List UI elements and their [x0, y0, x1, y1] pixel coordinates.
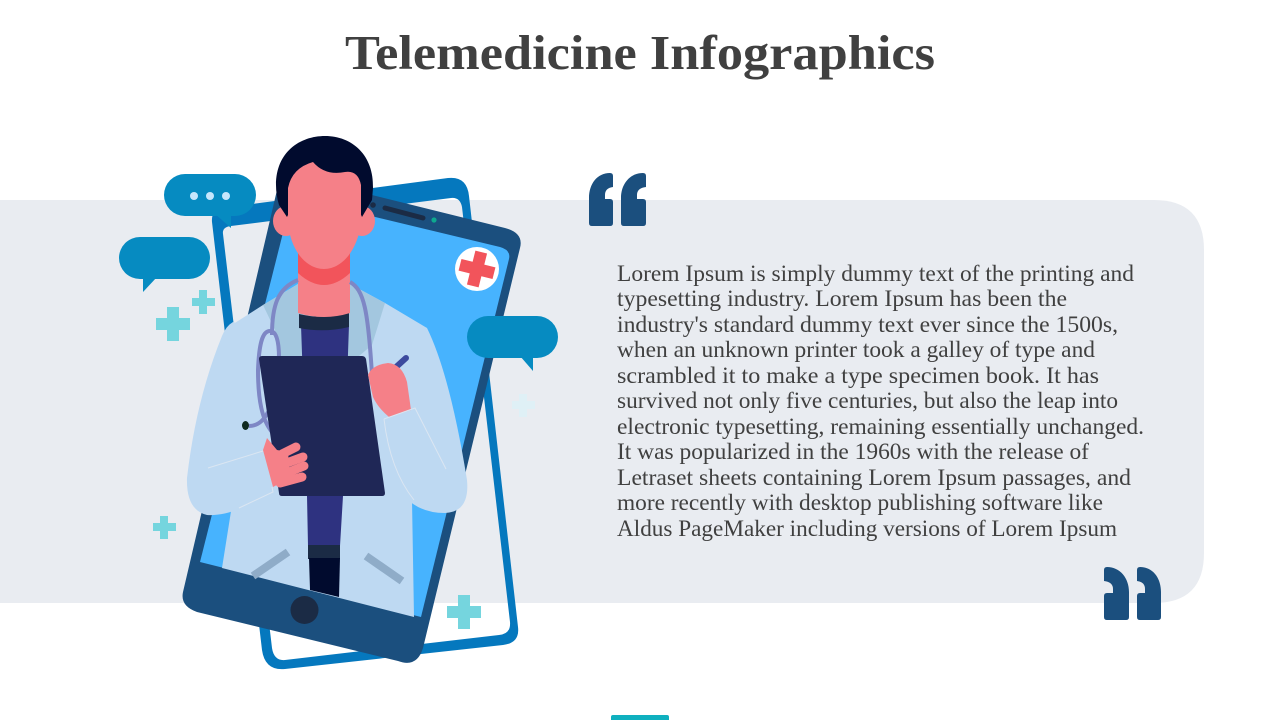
coat pockets — [253, 552, 402, 581]
plus icons — [153, 290, 535, 629]
neck — [298, 245, 350, 317]
coat seams — [208, 408, 446, 508]
text block: body paragraph: typesetting industry. Lorem Ipsum has been the — [617, 286, 1067, 311]
text block: body paragraph: electronic typesetting, remaining essentially unchanged. — [617, 414, 1144, 439]
text block: body paragraph: survived not only five centuries, but also the leap into — [617, 388, 1118, 413]
text block: body paragraph: Lorem Ipsum is simply dummy text of the printing and — [617, 261, 1135, 286]
trousers — [309, 558, 340, 597]
left hand — [263, 438, 304, 487]
panel: grey background band — [0, 200, 1204, 603]
front phone body — [183, 176, 521, 663]
text block: body paragraph: scrambled it to make a type specimen book. It has — [617, 363, 1099, 388]
text block: body paragraph: when an unknown printer took a galley of type and — [617, 337, 1095, 362]
illustration: doctor in smartphone — [119, 136, 558, 669]
chat bubble with dots — [164, 174, 256, 228]
title: Telemedicine Infographics — [345, 25, 935, 80]
icon: closing quotation mark — [1104, 567, 1161, 620]
coat body — [222, 284, 427, 617]
belt — [308, 545, 340, 559]
stethoscope — [249, 280, 372, 432]
icon: red cross badge — [455, 247, 499, 291]
ears — [273, 206, 375, 236]
text block: body paragraph: more recently with desktop publishing software like — [617, 490, 1103, 515]
stethoscope chest piece — [242, 421, 249, 430]
shirt — [301, 325, 349, 546]
footer teal tab — [611, 715, 669, 720]
text block: body paragraph: industry's standard dummy text ever since the 1500s, — [617, 312, 1118, 337]
coat right sleeve — [375, 320, 467, 513]
chat bubble left — [119, 237, 210, 292]
face — [288, 162, 361, 269]
icon: opening quotation mark — [589, 173, 646, 226]
chat bubble right — [467, 316, 558, 371]
text block: body paragraph: It was popularized in the 1960s with the release of — [617, 439, 1089, 464]
coat lapels — [263, 284, 385, 362]
back phone outline — [212, 178, 518, 669]
doctor figure — [187, 136, 467, 617]
hair — [276, 136, 373, 217]
pen — [395, 358, 406, 368]
phone home button — [290, 596, 318, 624]
neck shadow — [298, 250, 350, 285]
text block: body paragraph: Aldus PageMaker including versions of Lorem Ipsum — [617, 516, 1117, 541]
clipboard — [259, 356, 385, 496]
right hand — [368, 363, 411, 417]
phone speaker and camera — [370, 202, 437, 223]
coat left sleeve — [187, 322, 300, 515]
text block: body paragraph: Letraset sheets containing Lorem Ipsum passages, and — [617, 465, 1132, 490]
phone screen — [200, 197, 509, 617]
text block: body paragraph — [617, 261, 1144, 541]
collar — [299, 313, 349, 330]
